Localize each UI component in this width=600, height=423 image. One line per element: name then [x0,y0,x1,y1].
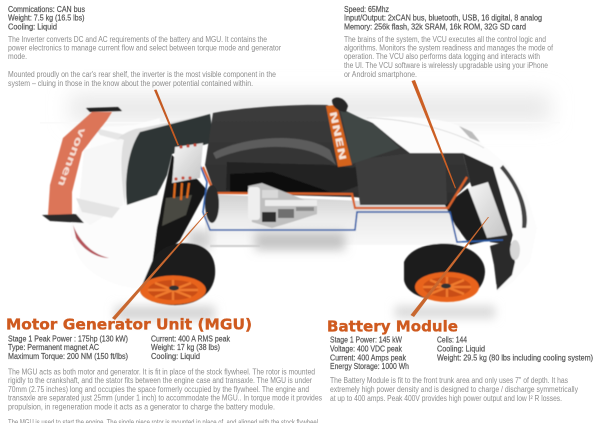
heading: Battery Module: Battery Module [327,318,458,336]
text block: inverter specs: Weight: 7.5 kg (16.5 lbs) [8,14,85,22]
text block: inverter specs: Commications: CAN bus [8,5,85,14]
text block: battery description: at up to 400 amps. Peak 400V provides high power output and low I² R losses. [330,394,562,403]
text block: VCU description: algorithms. Monitors the system readiness and manages the mode of [344,44,554,52]
orange high voltage cable [203,167,467,208]
text block: MGU description: propulsion, in regeneration mode it acts as a generator to charge the battery module. [8,402,275,412]
text block: VCU description [344,35,554,79]
text block: VCU description: or Android smartphone. [344,70,417,79]
panel: background glow behind car [40,94,560,320]
text block: MGU specs: Cooling: Liquid [151,352,200,361]
text block: battery specs: Cells: 144 [437,336,467,344]
motor generator disc [205,185,219,223]
rear window [126,114,214,205]
text block: VCU description: the UI. The VCU software is wirelessly upgradable using your iPhone [344,61,548,70]
text block: inverter description: power electronics to manage current flow and select between torque mode and generator [8,44,281,52]
text block: VCU specs: Input/Output: 2xCAN bus, bluetooth, USB, 16 digital, 8 analog [344,14,542,22]
inverter box [172,143,203,200]
text block: battery specs: Stage 1 Power: 145 kW [330,336,402,344]
rear wheel arch [152,155,207,265]
text block: VCU specs: Memory: 256k flash, 32k SRAM, 16k ROM, 32G SD card [344,22,526,32]
text block: battery description [330,376,578,403]
text block: VCU specs: Speed: 65Mhz [344,5,389,14]
arrow: MGU leader line [112,212,208,320]
front compartment dark panel [445,153,520,290]
arrow: inverter leader line [154,90,179,146]
heading: Motor Generator Unit: Motor Generator Unit (MGU) [6,316,252,334]
text block: MGU specs: Stage 1 Peak Power : 175hp (130 kW) [8,334,128,344]
text block: inverter description: system – cluing in those in the know about the power potential contained within. [8,79,253,88]
text block: MGU specs: Weight: 17 kg (38 lbs) [151,343,220,352]
text block: VCU description: operation. The VCU also performs data logging and interacts with [344,52,540,61]
car floor and shadow [188,194,462,250]
transaxle [248,183,317,228]
battery module plate [468,182,507,238]
rear wing: vonnen [55,126,87,188]
roof and interior [205,105,470,205]
side mirror [332,98,348,112]
text block: battery specs [330,336,593,371]
text block: battery specs: Voltage: 400 VDC peak [330,344,403,354]
text block: inverter description: Mounted proudly on the car's rear shelf, the inverter is the most visible component in the [8,70,276,79]
text block: MGU description: 70mm (2.75 inches) long and occupies the space formerly occupied by the flywheel. The engine and [8,385,309,394]
text block: battery specs: Cooling: Liquid [437,344,485,354]
text block: VCU specs [344,5,542,32]
arrow: VCU leader line [412,80,456,188]
text block: inverter description [8,35,281,88]
windshield orange stripe with text: NNEN [327,110,348,162]
rear wheel [140,243,215,305]
text block: MGU specs: Maximum Torque: 200 NM (150 ft/lbs) [8,352,128,361]
rear body shell [70,114,210,290]
text block: battery specs: Current: 400 Amps peak [330,354,407,362]
text block: MGU specs: Current: 400 A RMS peak [151,334,231,344]
text block: inverter specs [8,5,85,32]
blue coolant line [200,165,503,242]
text block: MGU description: The MGU acts as both motor and generator. It is fit in place of the stock flywheel. The rotor is mounted [8,368,315,376]
text block: MGU description [8,368,322,423]
windshield orange stripe with text [326,105,352,167]
text block: MGU description: rigidly to the crankshaft, and the stator fits between the engine case and transaxle. The MGU is under [8,376,312,385]
text block: battery specs: Energy Storage: 1000 Wh [330,362,409,371]
text block: MGU description: transaxle are separated just 25mm (under 1 inch) to accommodate the MGU.. In torque mode it provides [8,394,322,402]
arrow: battery leader line [410,217,489,317]
text block: inverter specs: Cooling: Liquid [8,22,57,32]
text block: inverter description: mode. [8,52,27,61]
front hood shell [367,117,537,293]
text block: VCU description: The brains of the system, the VCU executes all the control logic and [344,35,546,44]
text block: MGU specs [8,334,231,361]
car illustration [42,98,537,305]
rear wing [42,107,122,223]
text block: MGU specs: Type: Permanent magnet AC [8,343,99,352]
front wheel [404,244,485,302]
text block: inverter description: The Inverter converts DC and AC requirements of the battery and MGU. It contains the [8,35,267,44]
